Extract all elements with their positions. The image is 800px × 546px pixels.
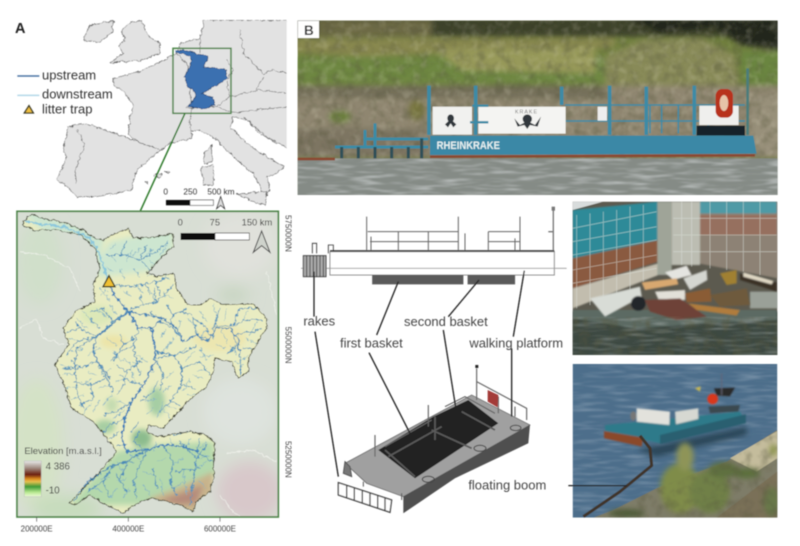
litter pile xyxy=(590,266,777,320)
scale bar: Europe: 250 xyxy=(183,186,198,196)
axis labels: northing xyxy=(284,215,293,478)
barge rakes xyxy=(335,123,428,158)
map frame xyxy=(17,211,278,517)
legend: elevation: -10 xyxy=(46,485,60,496)
legend: elevation: 4 386 xyxy=(46,462,70,473)
barge name: RHEINKRAKE xyxy=(437,140,500,152)
map background terrain xyxy=(10,211,283,522)
map: Great Britain xyxy=(110,21,161,63)
panel A: detail elevation map xyxy=(10,211,293,534)
map: continental Europe xyxy=(113,20,288,200)
map: islands xyxy=(145,145,267,205)
floating boom xyxy=(583,436,652,517)
map: country borders xyxy=(75,30,287,183)
axis labels: northing: 5750000N xyxy=(284,215,293,252)
panel B: main barge photo xyxy=(292,17,785,197)
map: extent box xyxy=(173,48,231,113)
scale bar: detail map: 75 xyxy=(210,218,220,228)
label: first basket: first basket xyxy=(340,335,403,350)
boat xyxy=(604,373,746,447)
axis labels: northing: 5500000N xyxy=(284,327,293,364)
scale bar: detail map xyxy=(178,218,272,240)
banner logos xyxy=(445,110,541,129)
drawing: isometric barge xyxy=(338,365,530,513)
technical drawings xyxy=(301,207,567,513)
axis labels: northing: 5250000N xyxy=(284,441,293,478)
barge banners xyxy=(433,106,745,136)
icon: north arrow Europe xyxy=(217,197,225,209)
label: second basket: second basket xyxy=(404,314,488,329)
legend: upstream xyxy=(17,68,96,83)
icon: red life ring xyxy=(716,89,733,118)
panel B label: B xyxy=(304,23,314,38)
map: tributaries xyxy=(60,242,263,505)
legend: downstream: downstream xyxy=(42,87,113,102)
scale bar: Europe xyxy=(163,186,235,205)
map: Rhine basin fill xyxy=(17,211,278,517)
axis labels: easting xyxy=(21,517,236,534)
floating boom leader line xyxy=(568,484,627,488)
barge hull xyxy=(430,136,757,155)
barge waterline xyxy=(298,155,755,159)
photo water xyxy=(295,158,782,197)
icon: litter trap marker xyxy=(103,276,115,287)
legend: litter trap: litter trap xyxy=(42,102,93,117)
scale bar: detail map: 0 xyxy=(178,218,183,228)
scale bar: Europe: 0 xyxy=(163,186,168,196)
panel A: Europe overview map xyxy=(17,20,288,212)
photo background bank xyxy=(292,17,785,195)
banner logos: KRAKE xyxy=(515,110,538,116)
map: Iberia xyxy=(57,123,160,197)
icon: north arrow detail map xyxy=(253,231,270,252)
barge superstructure railing xyxy=(429,68,748,135)
panel A label: A xyxy=(15,21,26,37)
legend: elevation: Elevation [m.a.s.l.] xyxy=(24,446,102,457)
leader lines xyxy=(314,271,524,477)
connector line to detail map xyxy=(140,113,185,212)
photo: litter caught in basket xyxy=(570,202,780,357)
map: basin outline xyxy=(23,214,267,513)
rocks and vegetation xyxy=(593,430,780,518)
panel B label xyxy=(298,21,319,38)
legend: upstream: upstream xyxy=(42,68,96,83)
label: walking platform: walking platform xyxy=(468,335,563,350)
map: Rhine basin xyxy=(176,50,227,109)
legend: elevation xyxy=(24,446,102,497)
axis labels: easting: 200000E xyxy=(21,525,53,534)
photo: barge with floating boom xyxy=(568,364,780,518)
scale bar: Europe: 500 km xyxy=(207,186,235,196)
map: main river network xyxy=(26,222,240,501)
label: floating boom: floating boom xyxy=(468,477,546,492)
drawing: side elevation xyxy=(301,207,567,284)
label: rakes: rakes xyxy=(303,314,336,329)
axis labels: easting: 600000E xyxy=(204,525,236,534)
scale bar: detail map: 150 km xyxy=(242,218,272,228)
map: Ireland xyxy=(83,21,113,42)
axis labels: easting: 400000E xyxy=(112,525,144,534)
